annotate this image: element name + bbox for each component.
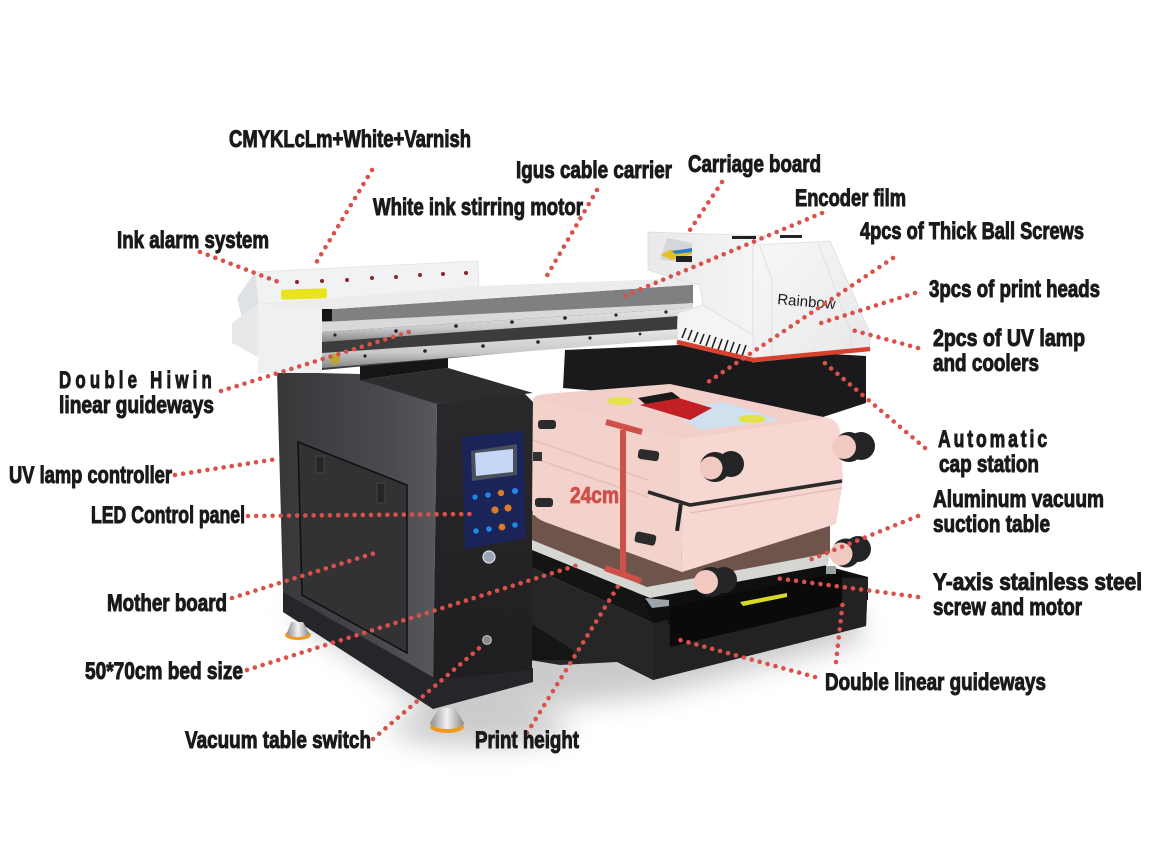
rail backing — [322, 285, 693, 370]
warning sticker — [740, 593, 787, 606]
callout labels — [9, 126, 1142, 754]
dotted leader lines — [175, 170, 925, 739]
door latches — [316, 456, 385, 503]
sticker — [607, 392, 780, 430]
table brackets — [645, 566, 836, 608]
rail screws — [333, 310, 668, 358]
gantry beam — [232, 261, 693, 373]
label: UV lamp: 2pcs of UV lamp — [933, 325, 1085, 352]
beam bracket — [322, 309, 332, 321]
label: LED panel: LED Control panel — [91, 502, 245, 529]
left seam clip — [533, 452, 542, 461]
label: White ink: White ink stirring motor — [373, 194, 583, 221]
ground shadow — [285, 590, 865, 746]
leader: ink alarm — [200, 252, 281, 283]
label: Double linear: Double linear guideways — [825, 669, 1046, 696]
zipper pull — [675, 504, 683, 531]
beam upper facet — [237, 272, 258, 318]
key switch — [483, 551, 495, 563]
warning label — [281, 288, 327, 300]
light cover strip — [322, 303, 693, 332]
base upper surface — [640, 565, 868, 625]
cooling vents — [682, 328, 746, 356]
label: Vacuum switch: Vacuum table switch — [185, 727, 371, 754]
zipper — [648, 481, 842, 505]
label: coolers: and coolers — [933, 350, 1039, 377]
height marker: 24cm — [605, 422, 642, 581]
label: CMYK: CMYKLcLm+White+Varnish — [229, 126, 471, 153]
leader: hiwin guideways — [221, 331, 412, 391]
label: print heads: 3pcs of print heads — [929, 276, 1100, 303]
beam top — [258, 278, 693, 312]
ink alarm lights — [295, 271, 468, 284]
encoder strip — [322, 285, 693, 322]
lower linear rail — [322, 329, 680, 368]
leader: carriage board — [690, 182, 722, 230]
panel plate — [462, 431, 526, 549]
upper linear rail — [322, 308, 693, 342]
leader: igus cable carrier — [545, 190, 597, 279]
base right face — [653, 578, 868, 680]
adjustable foot left — [285, 622, 311, 640]
vent grille — [530, 623, 573, 660]
label: Igus: Igus cable carrier — [516, 157, 672, 184]
label: Double Hiwin: Double Hiwin — [59, 367, 216, 394]
leader: print heads — [818, 293, 915, 324]
base left face — [530, 567, 653, 680]
label: UV controller: UV lamp controller — [9, 462, 172, 489]
base full right block — [653, 577, 868, 680]
body top cap — [360, 368, 533, 404]
print bed assembly — [532, 384, 875, 608]
top handles — [732, 235, 802, 239]
head cover — [753, 241, 870, 362]
carriage side face — [648, 232, 767, 360]
height value: 24cm — [570, 482, 619, 508]
suitcase seams — [533, 440, 842, 513]
body base plinth — [283, 588, 533, 709]
wheels — [694, 432, 875, 597]
leader: ball screws — [708, 258, 893, 382]
label: suction table: suction table — [933, 511, 1050, 538]
side handles — [535, 420, 660, 546]
leader: Y-axis — [775, 578, 918, 597]
label: Print height: Print height — [475, 727, 579, 754]
side door — [298, 442, 407, 653]
suitcase — [532, 384, 875, 597]
base under-table shadow — [530, 548, 670, 623]
lower front housing — [677, 305, 753, 360]
rear carriage support block — [563, 345, 866, 417]
label: cap station: cap station — [939, 451, 1039, 478]
yellow limit sensor — [330, 354, 340, 364]
leader: UV lamp — [852, 330, 918, 348]
leader: aluminum table — [807, 516, 918, 561]
machine body — [277, 358, 533, 733]
suitcase right face — [680, 418, 843, 572]
leader: bed size — [247, 565, 578, 670]
label: Ink alarm: Ink alarm system — [117, 227, 269, 254]
label: Aluminum: Aluminum vacuum — [933, 486, 1104, 513]
leader: encoder film — [622, 213, 822, 297]
leader: vacuum switch — [373, 644, 484, 739]
label: Carriage board: Carriage board — [688, 151, 821, 178]
leader: CMYK — [316, 170, 372, 263]
cover crease lines — [760, 242, 852, 358]
label: Ball screws: 4pcs of Thick Ball Screws — [860, 218, 1084, 245]
label: Encoder film: Encoder film — [795, 185, 906, 212]
leader: double linear right — [836, 600, 843, 662]
leader: lamp controller — [175, 459, 277, 475]
leader: LED panel — [248, 514, 470, 516]
cable window — [660, 238, 692, 263]
ink tubes — [660, 248, 692, 262]
leader: double linear front — [680, 640, 815, 677]
red trim — [677, 342, 870, 360]
label: bed size: 50*70cm bed size — [85, 658, 243, 685]
panel buttons — [472, 488, 518, 534]
beam end block — [258, 304, 322, 373]
leader: mother board — [232, 552, 378, 598]
control panel — [462, 431, 526, 563]
vacuum switch knob — [483, 636, 491, 644]
suitcase top panel — [533, 384, 828, 440]
print head carriage — [648, 232, 870, 362]
body front face — [433, 393, 533, 680]
suitcase left face — [532, 400, 682, 572]
label: linear guideways: linear guideways — [59, 392, 214, 419]
body side panel — [277, 372, 437, 677]
brand logo: Rainbow — [777, 291, 836, 313]
adjustable foot front — [430, 708, 464, 733]
label: Automatic: Automatic — [938, 426, 1050, 453]
vacuum table edge — [532, 540, 830, 598]
inner tray — [670, 572, 842, 647]
lcd screen — [471, 444, 517, 481]
leader: cap station — [820, 359, 925, 448]
printer machine — [232, 232, 875, 733]
vacuum table top — [532, 500, 830, 587]
dark gantry neck — [360, 358, 448, 380]
print bed base — [530, 548, 868, 680]
ink cover box — [255, 261, 479, 304]
leader: print height — [527, 583, 620, 733]
beam lower facet — [232, 303, 258, 357]
label: Mother board: Mother board — [107, 590, 227, 617]
label: screw and motor: screw and motor — [933, 594, 1082, 621]
lcd display — [475, 449, 513, 476]
